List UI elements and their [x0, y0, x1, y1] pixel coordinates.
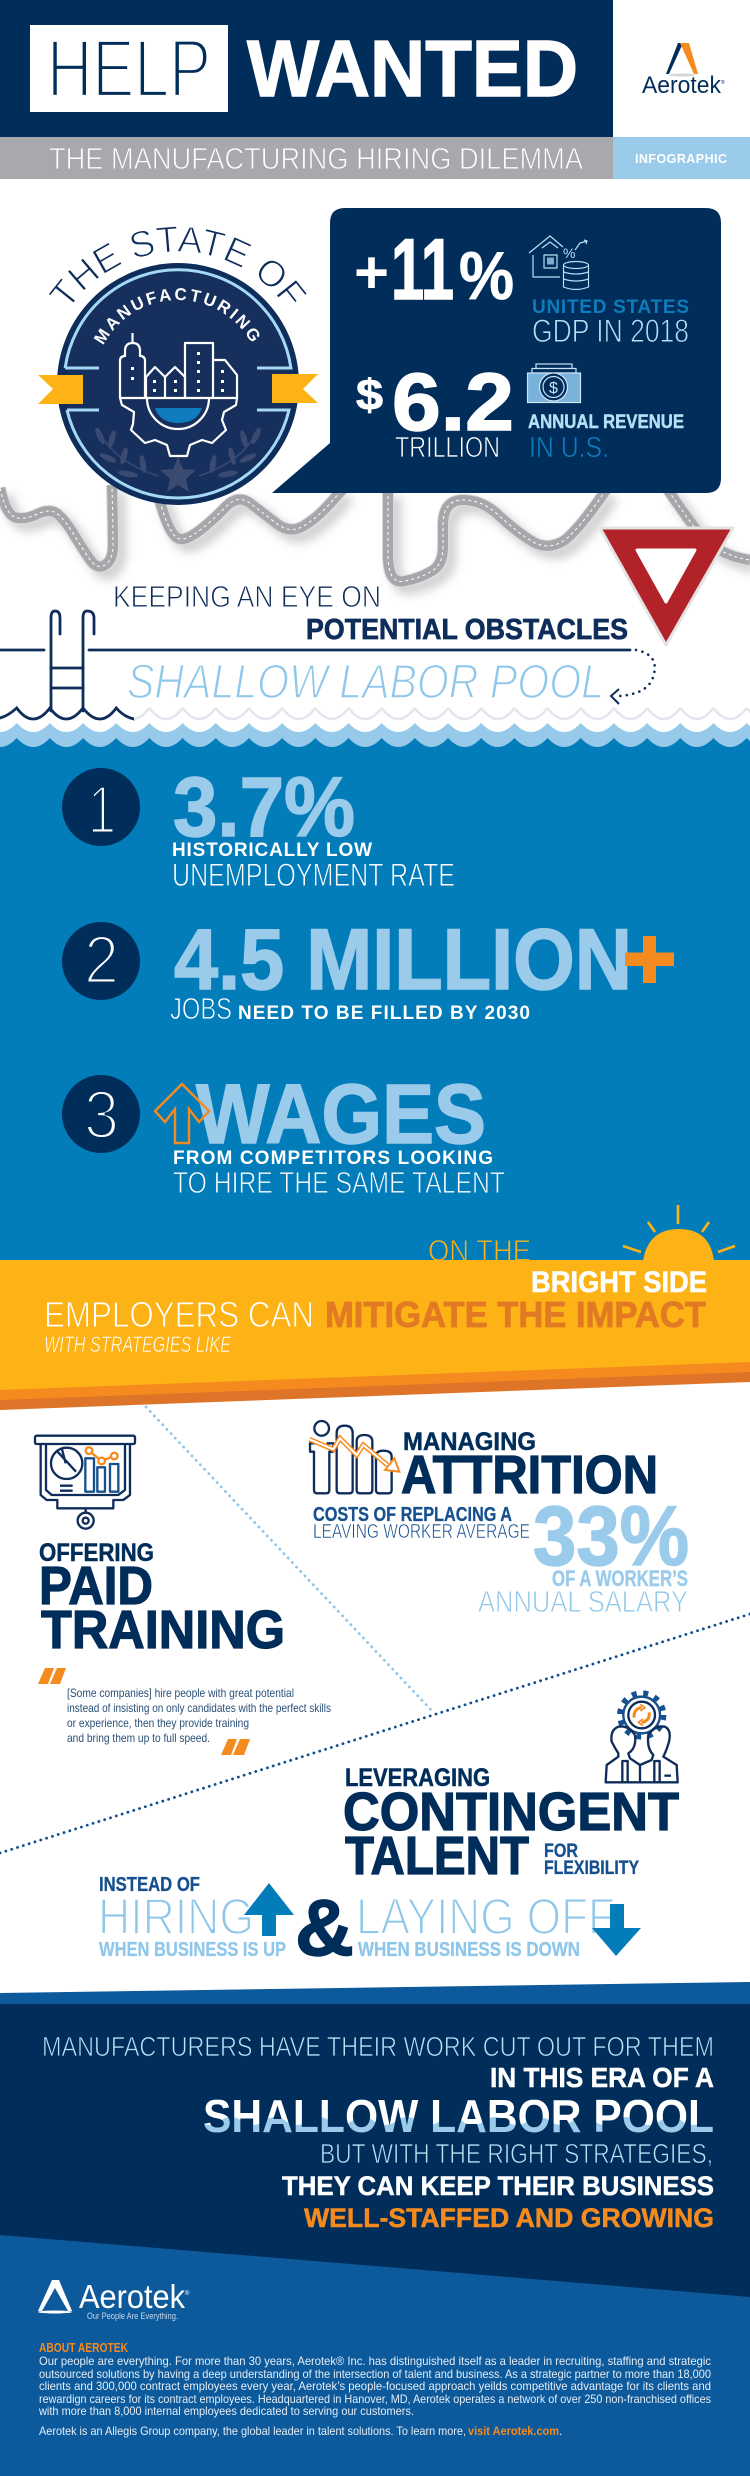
stat: +11% [354, 222, 514, 318]
ribbon left [38, 375, 83, 404]
quote text [67, 1686, 331, 1745]
about text: . [559, 2424, 562, 2438]
costs of replacing: COSTS OF REPLACING A [313, 1504, 512, 1526]
blue section [0, 738, 750, 1260]
quote text: [Some companies] hire people with great potential [67, 1686, 294, 1700]
icon: city on gear [120, 333, 237, 456]
label: GDP in 2018: GDP IN 2018 [532, 313, 689, 349]
heading: shallow labor pool: SHALLOW LABOR POOL [127, 656, 604, 709]
icon: people and gear [606, 1693, 678, 1782]
badge: state of manufacturing [38, 226, 318, 505]
logo: Aerotek top [642, 43, 725, 99]
leveraging: LEVERAGING [345, 1764, 490, 1792]
obstacle 3 [62, 1067, 505, 1200]
strategy: managing attrition [309, 1421, 689, 1619]
arc label: MANUFACTURING [94, 288, 260, 344]
infographic tag: INFOGRAPHIC [635, 152, 727, 166]
line 6: WELL-STAFFED AND GROWING [304, 2203, 714, 2233]
from competitors: FROM COMPETITORS LOOKING [173, 1148, 493, 1169]
obstacle 2 [62, 912, 674, 1026]
logo: Aerotek footer: Our People Are Everything. [87, 2311, 178, 2322]
historically low: HISTORICALLY LOW [172, 840, 372, 861]
quote text: and bring them up to full speed. [67, 1731, 210, 1745]
about heading: ABOUT AEROTEK [39, 2341, 128, 2355]
WANTED title: WANTED [247, 24, 578, 113]
obstacle 1 [62, 760, 455, 893]
stat wages: WAGES [196, 1067, 486, 1161]
icon: people with falling arrow [309, 1421, 399, 1493]
stat 33%: 33% [533, 1489, 689, 1583]
arrow: dotted curve to pool [611, 650, 655, 704]
logo: Aerotek footer: Aerotek [79, 2278, 185, 2315]
stat: 6.2: 6.2 [392, 357, 514, 448]
up arrow [244, 1883, 294, 1936]
orange plus [625, 936, 674, 983]
label: annual revenue: ANNUAL REVENUE [528, 412, 684, 433]
about text: visit Aerotek.com [468, 2424, 559, 2438]
strategy: paid training [35, 1436, 331, 1755]
offering: OFFERING [39, 1539, 154, 1567]
on the: ON THE [428, 1233, 531, 1268]
label: trillion: TRILLION [395, 432, 500, 464]
mitigate the impact: MITIGATE THE IMPACT [325, 1294, 706, 1335]
stat 4.5 million: 4.5 MILLION [174, 912, 632, 1008]
logo: Aerotek top: ® [721, 79, 725, 86]
when business is down: WHEN BUSINESS IS DOWN [358, 1939, 580, 1961]
icon: house and coins: % [563, 245, 575, 261]
attrition: ATTRITION [401, 1445, 658, 1505]
about text [38, 2341, 711, 2438]
light blue wave band [0, 723, 750, 753]
leaving worker average: LEAVING WORKER AVERAGE [313, 1521, 530, 1543]
managing: MANAGING [403, 1428, 536, 1456]
bright side: BRIGHT SIDE [531, 1266, 707, 1299]
heading: keeping an eye on: KEEPING AN EYE ON [113, 579, 381, 614]
stats panel [272, 208, 721, 493]
quote text: or experience, then they provide training [67, 1716, 249, 1730]
number 2 circle: 2 [84, 922, 119, 998]
icon: money stack: $ [549, 380, 558, 397]
with strategies like: WITH STRATEGIES LIKE [44, 1332, 231, 1357]
strategy: contingent talent [98, 1693, 679, 1972]
number 3 circle [62, 1075, 140, 1153]
label: in U.S.: IN U.S. [529, 432, 609, 464]
logo: Aerotek top: Aerotek [642, 72, 722, 99]
conclusion text [42, 2031, 714, 2233]
line 3: SHALLOW LABOR POOL [203, 2090, 714, 2142]
for flexibility: FOR [544, 1841, 578, 1862]
stat: +11%: 11 [391, 222, 454, 318]
arc title: THE STATE OF [49, 226, 306, 302]
winding road [0, 485, 750, 588]
wreath [93, 427, 263, 479]
HELP box: HELP [47, 24, 211, 114]
about text: Our people are everything. For more than 30 years, Aerotek® Inc. has distinguished itself as a leader in recruiting, staffing and strategic [39, 2354, 711, 2368]
stat: +11%: % [459, 238, 514, 314]
annual salary: ANNUAL SALARY [478, 1584, 688, 1619]
stat: +11%: + [354, 239, 389, 306]
number 3 circle: 3 [84, 1077, 119, 1153]
contingent: CONTINGENT [343, 1782, 679, 1842]
dotted dividers [0, 1407, 750, 1853]
ribbon right [272, 374, 318, 403]
subtitle bar: THE MANUFACTURING HIRING DILEMMA [49, 141, 583, 176]
icon: orange outline arrow [155, 1084, 209, 1143]
about text: clients and 300,000 contract employees every year, Aerotek’s people-focused approach yeilds competitive advantage for its clients and [39, 2379, 711, 2393]
number 1 circle: 1 [88, 772, 116, 848]
employers can: EMPLOYERS CAN [44, 1294, 314, 1335]
bright side band [0, 1260, 750, 1410]
icon: money stack [528, 364, 580, 402]
close quote mark [221, 1739, 250, 1755]
open quote mark [38, 1668, 66, 1684]
down arrow [592, 1904, 641, 1956]
hiring: HIRING [98, 1888, 254, 1945]
stat 3.7%: 3.7% [173, 760, 355, 854]
stat: $ sign: $ [356, 371, 383, 420]
icon: pool ladder [0, 611, 630, 719]
jobs: JOBS [170, 991, 232, 1026]
icon: house and coins [529, 236, 588, 290]
line 2: IN THIS ERA OF A [490, 2062, 714, 2093]
laying off: LAYING OFF [356, 1888, 615, 1945]
star [160, 457, 196, 492]
yield sign [600, 528, 733, 645]
about text: with more than 8,000 internal employees dedicated to serving our customers. [38, 2404, 414, 2418]
logo: Aerotek footer: ® [185, 2290, 190, 2297]
talent: TALENT [345, 1826, 529, 1886]
for flexibility [544, 1841, 639, 1879]
logo: Aerotek footer [38, 2278, 190, 2322]
icon: presentation board [35, 1436, 135, 1529]
training: TRAINING [41, 1600, 285, 1660]
line 5: THEY CAN KEEP THEIR BUSINESS [282, 2171, 714, 2201]
need to be filled: NEED TO BE FILLED BY 2030 [238, 1003, 530, 1024]
heading: potential obstacles: POTENTIAL OBSTACLES [306, 614, 628, 646]
of a worker's: OF A WORKER’S [552, 1566, 688, 1591]
when business is up: WHEN BUSINESS IS UP [99, 1939, 286, 1961]
for flexibility: FLEXIBILITY [544, 1858, 639, 1879]
number 2 circle [62, 922, 140, 1000]
number 1 circle [62, 768, 140, 848]
to hire: TO HIRE THE SAME TALENT [173, 1165, 505, 1200]
header banner [0, 0, 613, 137]
quote text: instead of insisting on only candidates with the perfect skills [67, 1701, 331, 1715]
icon: sun [623, 1205, 735, 1261]
infographic tag [613, 137, 750, 179]
pale wave line [134, 707, 750, 723]
ampersand: & [295, 1883, 354, 1972]
footer background [0, 1982, 750, 2476]
label: United States: UNITED STATES [532, 297, 689, 318]
instead of: INSTEAD OF [99, 1874, 200, 1896]
unemployment rate: UNEMPLOYMENT RATE [172, 857, 455, 893]
paid: PAID [39, 1556, 153, 1616]
about text: Aerotek is an Allegis Group company, the global leader in talent solutions. To learn more, [39, 2424, 466, 2438]
